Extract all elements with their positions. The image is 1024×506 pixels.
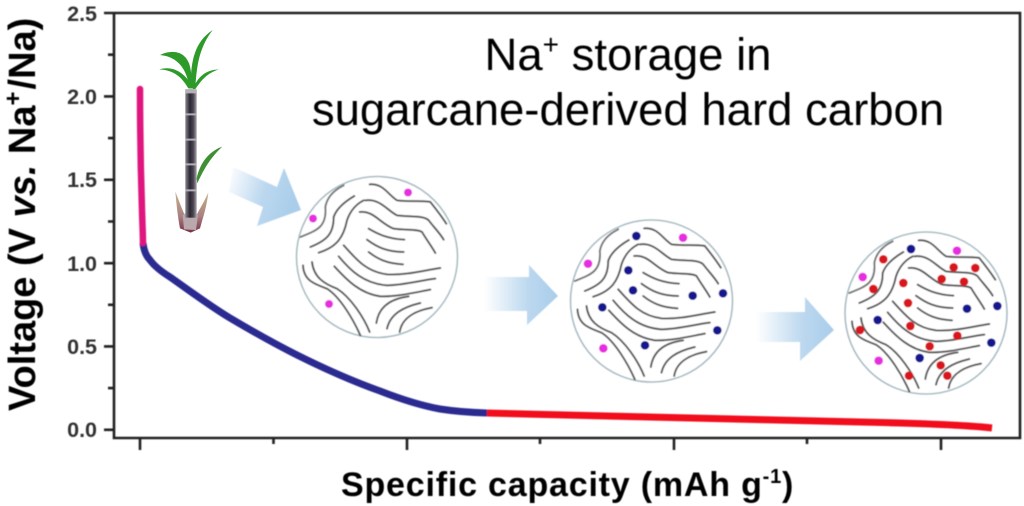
chart title: storage in <box>559 29 772 80</box>
arrow: first to second carbon <box>484 265 558 325</box>
y axis title: Voltage (V vs. Na <box>2 105 44 411</box>
icon: sugarcane plant <box>159 30 222 233</box>
sodium dots: magenta, blue and red <box>856 245 1002 380</box>
curve segment: sloping region (blue) <box>143 243 487 413</box>
y axis tick labels: 0.5 <box>67 335 97 359</box>
y axis tick labels: 2.0 <box>67 85 97 109</box>
curve segment: initial region (pink) <box>140 89 143 243</box>
panel: hard carbon with adsorbed sodium at defects <box>296 176 458 338</box>
x axis title: -1 <box>763 466 782 488</box>
y axis title: + <box>0 91 27 105</box>
chart title: sugarcane-derived hard carbon <box>312 84 944 135</box>
y axis tick labels: 1.0 <box>67 252 97 276</box>
voltage curve <box>140 89 992 428</box>
chart title: Na <box>484 29 543 80</box>
chart title: + <box>543 29 559 60</box>
panel: hard carbon with pore-filled sodium <box>845 232 1007 394</box>
sodium dots: magenta and blue <box>584 232 727 353</box>
y axis tick labels <box>67 2 97 442</box>
y axis tick labels: 1.5 <box>67 168 97 192</box>
x axis title: Specific capacity (mAh g <box>341 466 763 504</box>
chart title <box>312 29 944 135</box>
y axis tick labels: 0.0 <box>67 418 97 442</box>
chart axes <box>104 13 1020 450</box>
x axis title: ) <box>782 466 794 504</box>
panel: hard carbon with intercalated sodium <box>570 220 732 382</box>
arrow: second to third carbon <box>756 297 834 361</box>
sodium dots: magenta <box>309 188 412 308</box>
y axis title: /Na) <box>2 18 44 89</box>
y axis tick labels: 2.5 <box>67 2 97 26</box>
arrow: sugarcane to first carbon <box>229 167 301 226</box>
curve segment: plateau region (red) <box>487 413 992 428</box>
